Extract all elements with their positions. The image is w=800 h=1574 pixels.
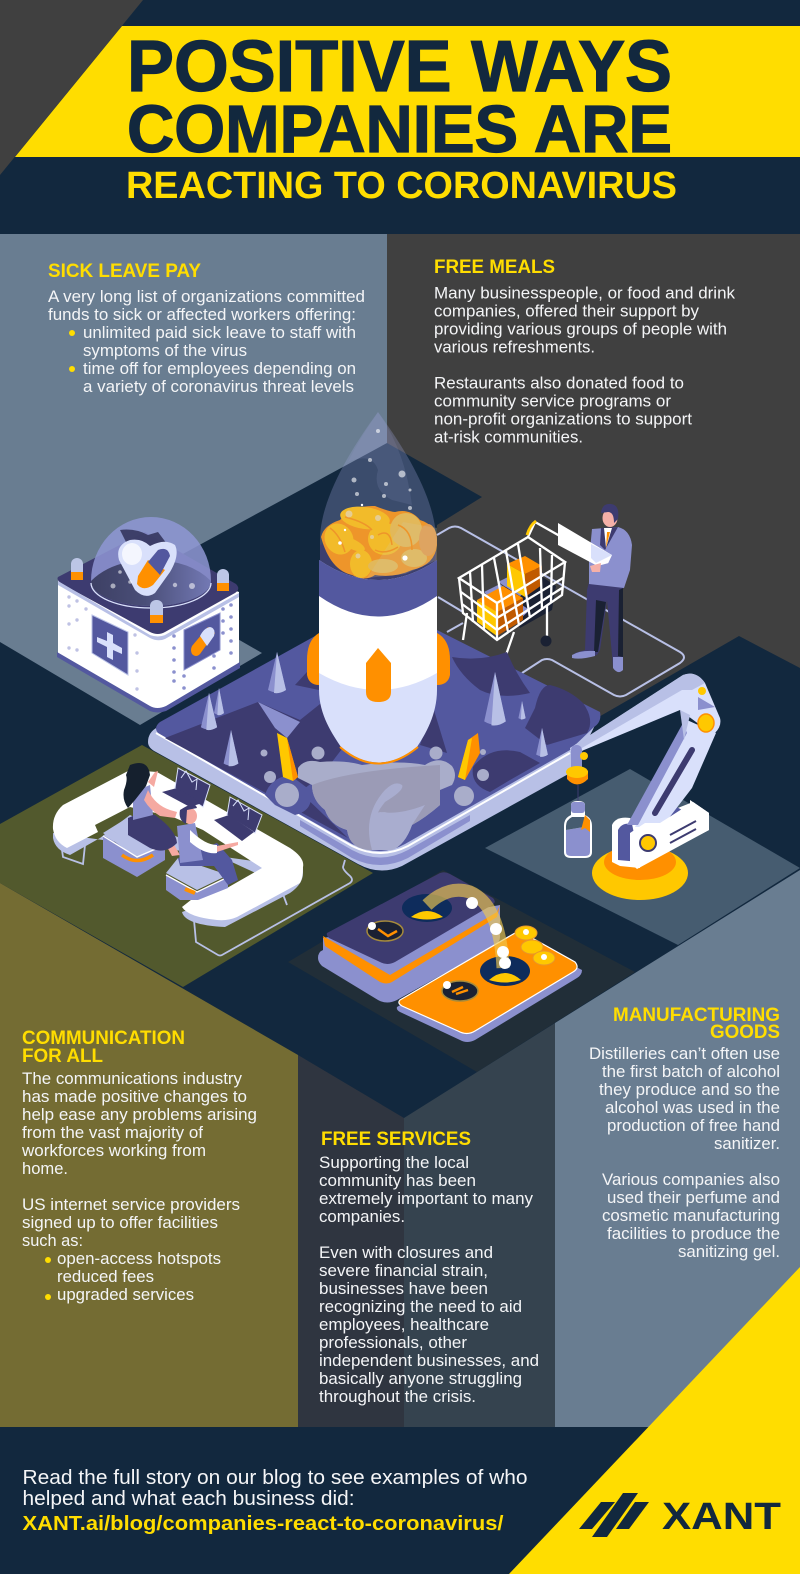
text block: manufacturing goods: GOODS (710, 1022, 780, 1043)
panel: phones floor (288, 870, 635, 1072)
text block: communication for all: from the vast majority of (22, 1124, 203, 1142)
text block: free services: companies. (319, 1208, 405, 1226)
gold coins (515, 926, 555, 965)
text block: free meals: Restaurants also donated food to (434, 374, 684, 392)
title (127, 27, 672, 167)
text block: free services: severe financial strain, (319, 1262, 488, 1280)
icon: vial bottle (564, 785, 592, 858)
text block: sick leave pay (48, 261, 365, 396)
text block: free services: extremely important to many (319, 1190, 534, 1208)
text block: manufacturing goods: Distilleries can’t often use (589, 1045, 780, 1063)
text block: free meals: companies, offered their support by (434, 302, 700, 320)
title band: yellow (15, 26, 800, 157)
text block: free services: recognizing the need to aid (319, 1298, 522, 1316)
text block: sick leave pay: time off for employees depending on (83, 360, 356, 378)
coin arc transfer (427, 890, 511, 969)
text block: manufacturing goods: Various companies also (602, 1171, 780, 1189)
text block: free services: employees, healthcare (319, 1316, 489, 1334)
text block: communication for all: upgraded services (57, 1286, 194, 1304)
title: COMPANIES ARE (127, 92, 672, 167)
connector lines behind cart (437, 526, 684, 696)
text block: communication for all: workforces working from (21, 1142, 206, 1160)
logo: XANT (579, 1493, 781, 1538)
text block: manufacturing goods: production of free hand (607, 1117, 780, 1135)
text block: sick leave pay: a variety of coronavirus threat levels (83, 378, 354, 396)
header corner: dark grey triangle (0, 0, 143, 175)
text block: manufacturing goods: MANUFACTURING (613, 1005, 780, 1026)
text block: free services (319, 1129, 539, 1406)
text block: communication for all: such as: (22, 1232, 83, 1250)
text block: free services: throughout the crisis. (319, 1388, 476, 1406)
footer call to action: XANT.ai/blog/companies-react-to-coronavirus/ (22, 1513, 504, 1535)
figures: woman and man at laptops (124, 763, 238, 885)
panel: manufacturing background (555, 870, 800, 1427)
text block: manufacturing goods: sanitizer. (714, 1135, 780, 1153)
text block: sick leave pay: SICK LEAVE PAY (48, 261, 201, 282)
logo: XANT: XANT (662, 1496, 781, 1538)
text block: free services: community has been (319, 1172, 476, 1190)
footer call to action (22, 1467, 528, 1535)
text block: sick leave pay: A very long list of organizations committed (48, 288, 365, 306)
text block: manufacturing goods (589, 1005, 780, 1261)
text block: communication for all: reduced fees (57, 1268, 154, 1286)
text block: manufacturing goods: they produce and so the (599, 1081, 780, 1099)
text block: communication for all: FOR ALL (22, 1046, 103, 1067)
illustration: phone one (318, 872, 500, 1002)
figure: businessman with tablet (558, 504, 632, 672)
text block: free services: basically anyone struggling (319, 1370, 522, 1388)
text block: free services: businesses have been (319, 1280, 488, 1298)
illustration: workstation desk and cables (53, 770, 352, 956)
panel: robot floor (485, 769, 800, 945)
text block: manufacturing goods: facilities to produce the (607, 1225, 780, 1243)
text block: communication for all: The communications industry (22, 1070, 243, 1088)
illustration: robot arm (566, 674, 720, 900)
text block: communication for all: has made positive changes to (22, 1088, 247, 1106)
text block: free services: professionals, other (319, 1334, 468, 1352)
icon: shopping cart (459, 521, 590, 655)
footer call to action: helped and what each business did: (22, 1488, 354, 1510)
text block: free meals: various refreshments. (434, 338, 595, 356)
text block: free meals (434, 257, 736, 446)
text block: free meals: providing various groups of people with (434, 320, 727, 338)
text block: free services: Even with closures and (319, 1244, 493, 1262)
landing legs (277, 733, 480, 781)
text block: sick leave pay: funds to sick or affected workers offering: (48, 306, 356, 324)
text block: free services: independent businesses, and (319, 1352, 539, 1370)
panel: communication background (0, 883, 298, 1427)
illustration: rocket with brain (307, 412, 450, 764)
footer call to action: Read the full story on our blog to see examples of who (22, 1467, 528, 1489)
text block: manufacturing goods: sanitizing gel. (678, 1243, 780, 1261)
laptops (162, 768, 262, 841)
stools (103, 818, 228, 900)
text block: manufacturing goods: alcohol was used in the (605, 1099, 780, 1117)
illustration: rocket launch platform (148, 600, 600, 871)
panel: sick leave background (0, 234, 387, 725)
text block: communication for all (21, 1028, 257, 1304)
text block: communication for all: COMMUNICATION (22, 1028, 185, 1049)
text block: free services: Supporting the local (319, 1154, 469, 1172)
text block: free meals: Many businesspeople, or food and drink (434, 284, 736, 302)
text block: free meals: community service programs or (434, 392, 672, 410)
text block: manufacturing goods: used their perfume and (607, 1189, 780, 1207)
text block: free meals: FREE MEALS (434, 257, 555, 278)
text block: communication for all: help ease any problems arising (22, 1106, 257, 1124)
text block: free services: FREE SERVICES (321, 1129, 471, 1150)
title: POSITIVE WAYS (127, 27, 672, 107)
text block: sick leave pay: symptoms of the virus (83, 342, 247, 360)
text block: communication for all: signed up to offer facilities (22, 1214, 218, 1232)
panel: free meals background (387, 234, 800, 722)
text block: manufacturing goods: the first batch of alcohol (602, 1063, 780, 1081)
text block: manufacturing goods: cosmetic manufacturing (602, 1207, 780, 1225)
text block: communication for all: open-access hotspots (57, 1250, 221, 1268)
text block: sick leave pay: unlimited paid sick leave to staff with (83, 324, 356, 342)
illustration: phone two (397, 932, 582, 1042)
text block: communication for all: US internet service providers (22, 1196, 240, 1214)
text block: free meals: non-profit organizations to support (434, 410, 692, 428)
panel: free services background (298, 1023, 555, 1427)
text block: communication for all: home. (22, 1160, 68, 1178)
subtitle: REACTING TO CORONAVIRUS (126, 165, 677, 207)
footer corner: yellow (509, 1267, 800, 1574)
panel: workstation floor (0, 745, 373, 987)
illustration: medicine box (57, 517, 240, 712)
text block: free meals: at-risk communities. (434, 428, 583, 446)
